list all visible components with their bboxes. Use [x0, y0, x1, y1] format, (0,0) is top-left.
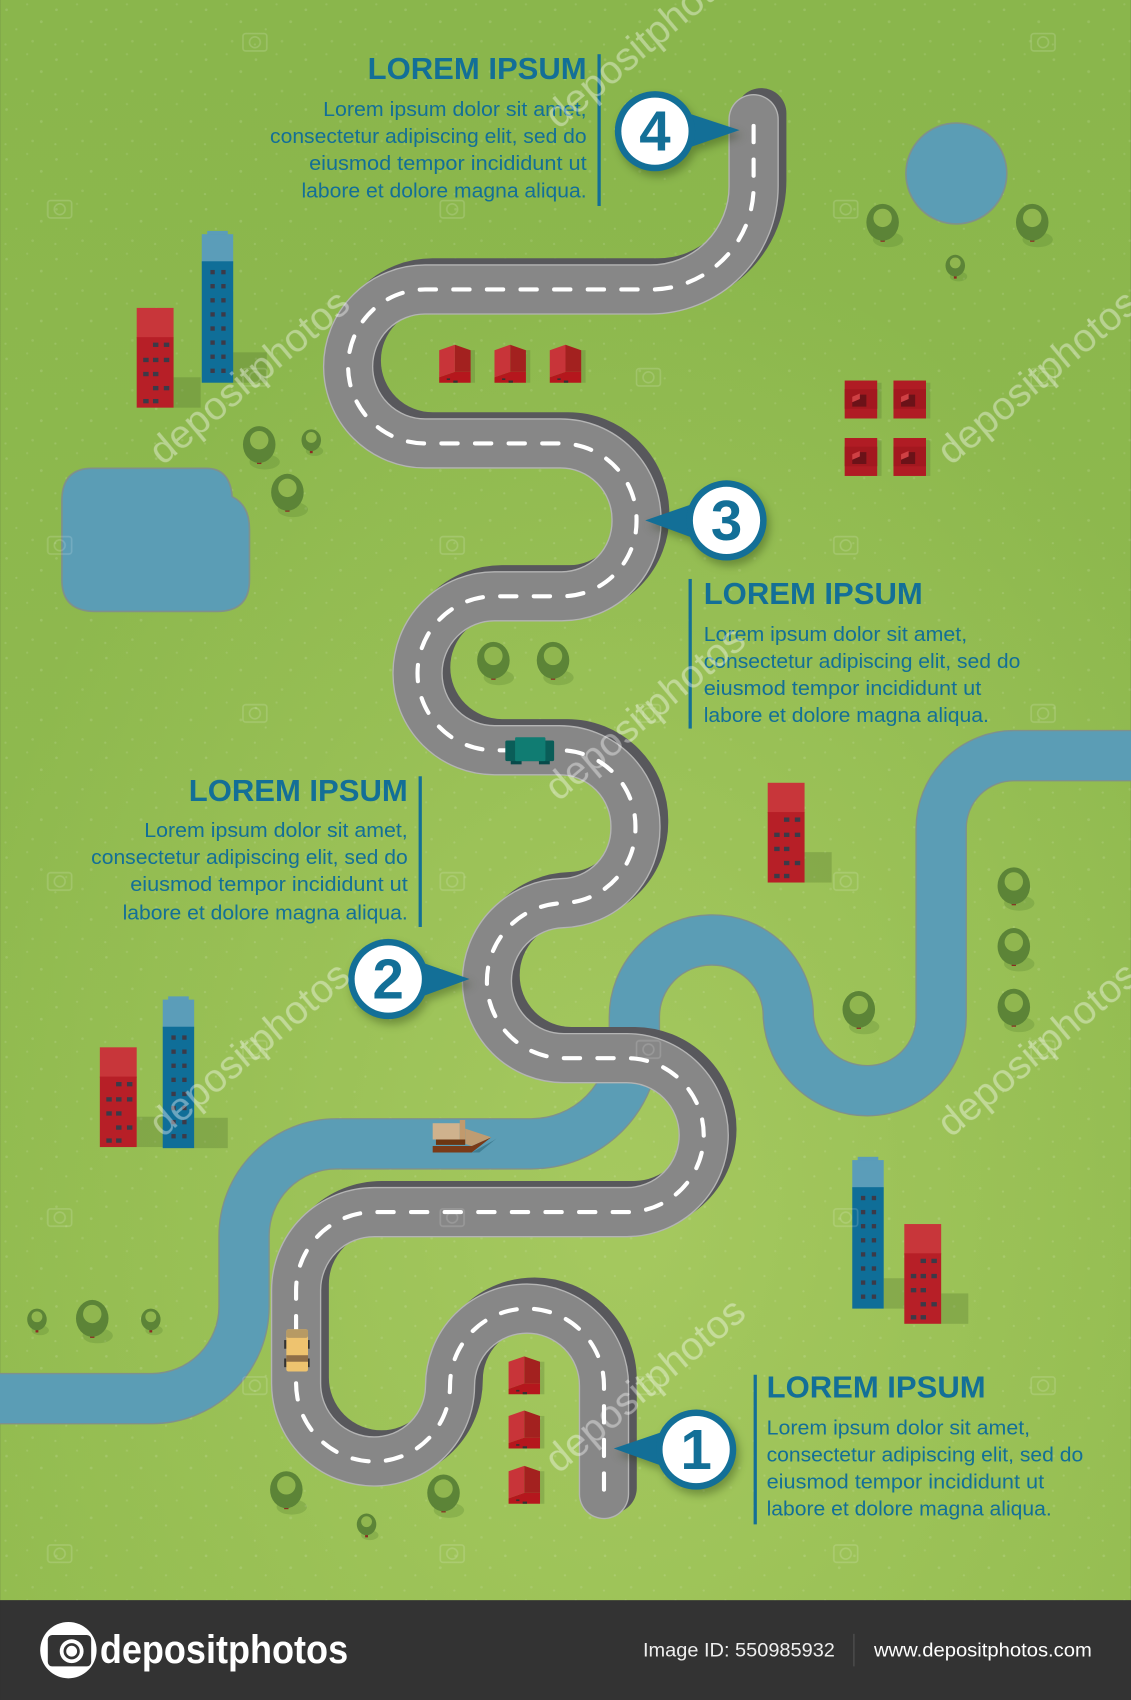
callout text 2: consectetur adipiscing elit, sed do [91, 846, 408, 869]
footer logo [40, 1622, 348, 1678]
buildings: upper left [137, 231, 267, 408]
callout text 4 [270, 53, 601, 206]
callout text 3: consectetur adipiscing elit, sed do [704, 650, 1020, 673]
watermark text: depositphotos [537, 617, 754, 809]
footer bar: Image ID: 550985932 [643, 1640, 835, 1662]
callout text 3 [689, 578, 1020, 729]
trees [27, 204, 1053, 1540]
lake: round [906, 123, 1007, 224]
callout text 4: Lorem ipsum dolor sit amet, [323, 98, 587, 121]
callout marker 1 [614, 1409, 736, 1490]
buildings: lower right [852, 1157, 968, 1324]
callout text 3: eiusmod tempor incididunt ut [704, 677, 982, 700]
watermark text: depositphotos [141, 281, 358, 473]
callout text 2: eiusmod tempor incididunt ut [130, 873, 408, 896]
callout marker 3: 3 [711, 489, 742, 552]
callout text 2: Lorem ipsum dolor sit amet, [144, 819, 408, 842]
car: taxi [284, 1329, 310, 1371]
callout text 2: labore et dolore magna aliqua. [123, 901, 408, 924]
callout text 3: labore et dolore magna aliqua. [704, 704, 989, 727]
callout text 2 [91, 775, 422, 927]
houses: four block [845, 381, 930, 476]
buildings: lower left [100, 996, 228, 1148]
callout text 1: Lorem ipsum dolor sit amet, [767, 1416, 1030, 1439]
callout marker 3 [645, 480, 767, 561]
callout marker 4: 4 [639, 100, 671, 163]
callout text 1: consectetur adipiscing elit, sed do [767, 1443, 1083, 1466]
callout text 4: LOREM IPSUM [368, 53, 587, 86]
building: centre right [768, 783, 832, 883]
callout text 1: eiusmod tempor incididunt ut [767, 1471, 1044, 1494]
callout text 1: labore et dolore magna aliqua. [767, 1498, 1052, 1521]
boat on river [433, 1120, 497, 1152]
road with lane markings [296, 113, 761, 1494]
watermark text [141, 0, 1131, 1481]
callout text 2: LOREM IPSUM [189, 775, 408, 808]
car: teal [505, 737, 554, 764]
callout text 1: LOREM IPSUM [767, 1372, 986, 1405]
callout marker 2 [348, 939, 470, 1019]
callout marker 4 [615, 91, 740, 171]
river [0, 756, 1131, 1399]
callout marker 2: 2 [373, 948, 404, 1011]
callout marker 1: 1 [680, 1418, 712, 1481]
callout text 3: Lorem ipsum dolor sit amet, [704, 623, 967, 646]
houses: row under top road [439, 345, 586, 383]
footer logo: depositphotos [100, 1628, 348, 1672]
footer bar: www.depositphotos.com [873, 1640, 1092, 1662]
houses: column inside bottom loop [509, 1356, 544, 1504]
lake: left [62, 468, 249, 611]
watermark text: depositphotos [537, 1290, 754, 1481]
callout text 4: consectetur adipiscing elit, sed do [270, 125, 587, 148]
watermark text: depositphotos [141, 953, 358, 1145]
footer bar [0, 1600, 1131, 1700]
callout text 3: LOREM IPSUM [704, 578, 923, 611]
callout text 4: labore et dolore magna aliqua. [302, 179, 587, 202]
callout text 4: eiusmod tempor incididunt ut [309, 152, 587, 175]
callout text 1 [754, 1372, 1083, 1524]
